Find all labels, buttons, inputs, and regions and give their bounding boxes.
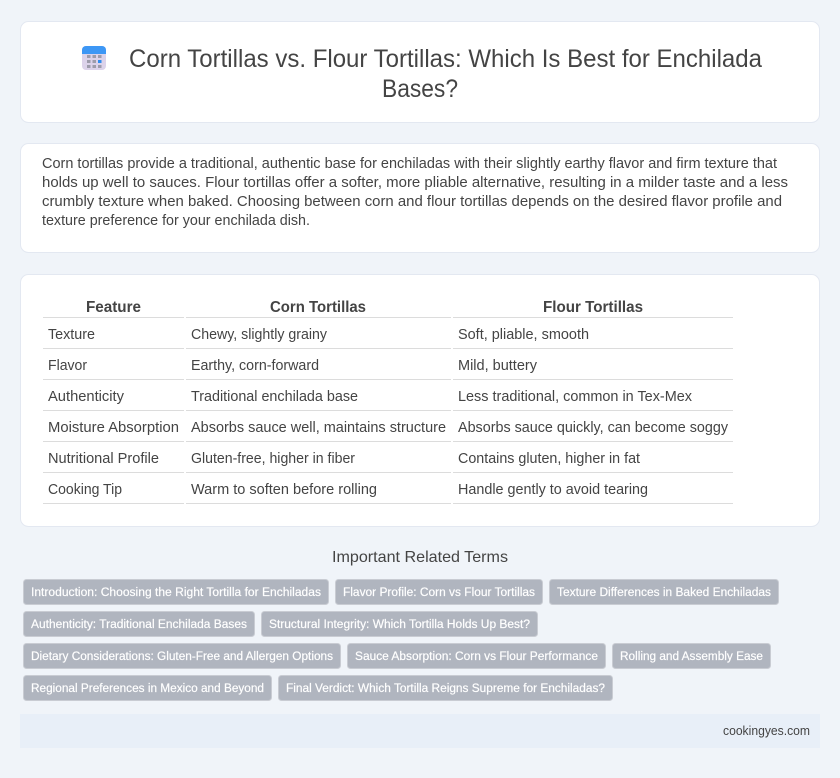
text block: introduction: holds up well to sauces. Flour tortillas offer a softer, more pliable alternative, resulting in a milder taste and a less [42, 175, 788, 191]
tag [348, 644, 606, 668]
table row: texture: Chewy, slightly grainy [191, 327, 328, 343]
tag [24, 612, 254, 636]
tag [24, 644, 340, 668]
table row: authenticity: Traditional enchilada base [191, 389, 358, 405]
table header [86, 299, 643, 316]
table row: flavor [48, 358, 538, 374]
footer: cookingyes.com [723, 723, 810, 738]
tag [336, 580, 542, 604]
table row: flavor: Mild, buttery [458, 358, 538, 374]
table row: moisture absorption [48, 420, 729, 436]
table header: Feature [86, 299, 141, 316]
tag: Rolling and Assembly Ease [620, 649, 763, 663]
table row: cooking tip: Warm to soften before rolling [191, 482, 377, 498]
table row: flavor: Flavor [48, 358, 87, 374]
table row: texture: Texture [48, 327, 95, 343]
table row: moisture absorption: Absorbs sauce quickly, can become soggy [458, 420, 729, 436]
icon: calendar [82, 46, 106, 70]
table row: moisture absorption: Absorbs sauce well, maintains structure [191, 420, 446, 436]
tag: Flavor Profile: Corn vs Flour Tortillas [343, 585, 535, 599]
text block: introduction [42, 156, 788, 229]
title: Corn Tortillas vs. Flour Tortillas: Which Is Best for Enchilada [129, 45, 762, 73]
tag: Regional Preferences in Mexico and Beyond [31, 681, 264, 695]
text block: introduction: texture preference for your enchilada dish. [42, 213, 310, 229]
table row: nutritional profile [48, 451, 640, 467]
tag [612, 644, 770, 668]
text block: introduction: Corn tortillas provide a traditional, authentic base for enchiladas with their slightly earthy flavor and firm texture that [42, 156, 777, 172]
table row: nutritional profile: Contains gluten, higher in fat [458, 451, 640, 467]
tag [550, 580, 778, 604]
table row: texture: Soft, pliable, smooth [458, 327, 589, 343]
panel: title card [20, 22, 820, 122]
table row: texture [48, 327, 589, 343]
tag [278, 676, 612, 700]
tag: Structural Integrity: Which Tortilla Holds Up Best? [269, 617, 530, 631]
tag: Introduction: Choosing the Right Tortilla for Enchiladas [31, 585, 321, 599]
tag: Final Verdict: Which Tortilla Reigns Supreme for Enchiladas? [286, 681, 605, 695]
tag [24, 676, 272, 700]
table header: Corn Tortillas [270, 299, 366, 316]
table header: Flour Tortillas [543, 299, 643, 316]
tag: Texture Differences in Baked Enchiladas [557, 585, 771, 599]
tag [262, 612, 538, 636]
tag: Authenticity: Traditional Enchilada Bases [31, 617, 247, 631]
panel: comparison table [20, 274, 820, 526]
title: Bases? [382, 75, 458, 103]
table row: cooking tip: Handle gently to avoid tearing [458, 482, 648, 498]
tag: Dietary Considerations: Gluten-Free and Allergen Options [31, 649, 333, 663]
table row: authenticity [48, 389, 693, 405]
title [129, 45, 762, 103]
tag: Sauce Absorption: Corn vs Flour Performance [355, 649, 598, 663]
table row: cooking tip [48, 482, 648, 498]
table row: cooking tip: Cooking Tip [48, 482, 122, 498]
table row: authenticity: Less traditional, common in Tex-Mex [458, 389, 693, 405]
related term tags [24, 580, 778, 700]
table row: nutritional profile: Nutritional Profile [48, 451, 159, 467]
table row: flavor: Earthy, corn-forward [191, 358, 319, 374]
panel: introduction [20, 144, 820, 252]
heading: related terms: Important Related Terms [332, 549, 508, 566]
table row: authenticity: Authenticity [48, 389, 125, 405]
footer [20, 714, 820, 748]
tag [24, 580, 328, 604]
text block: introduction: crumbly texture when baked. Choosing between corn and flour tortillas depends on the desired flavor profile and [42, 194, 782, 210]
table row: nutritional profile: Gluten-free, higher in fiber [191, 451, 355, 467]
table row: moisture absorption: Moisture Absorption [48, 420, 179, 436]
